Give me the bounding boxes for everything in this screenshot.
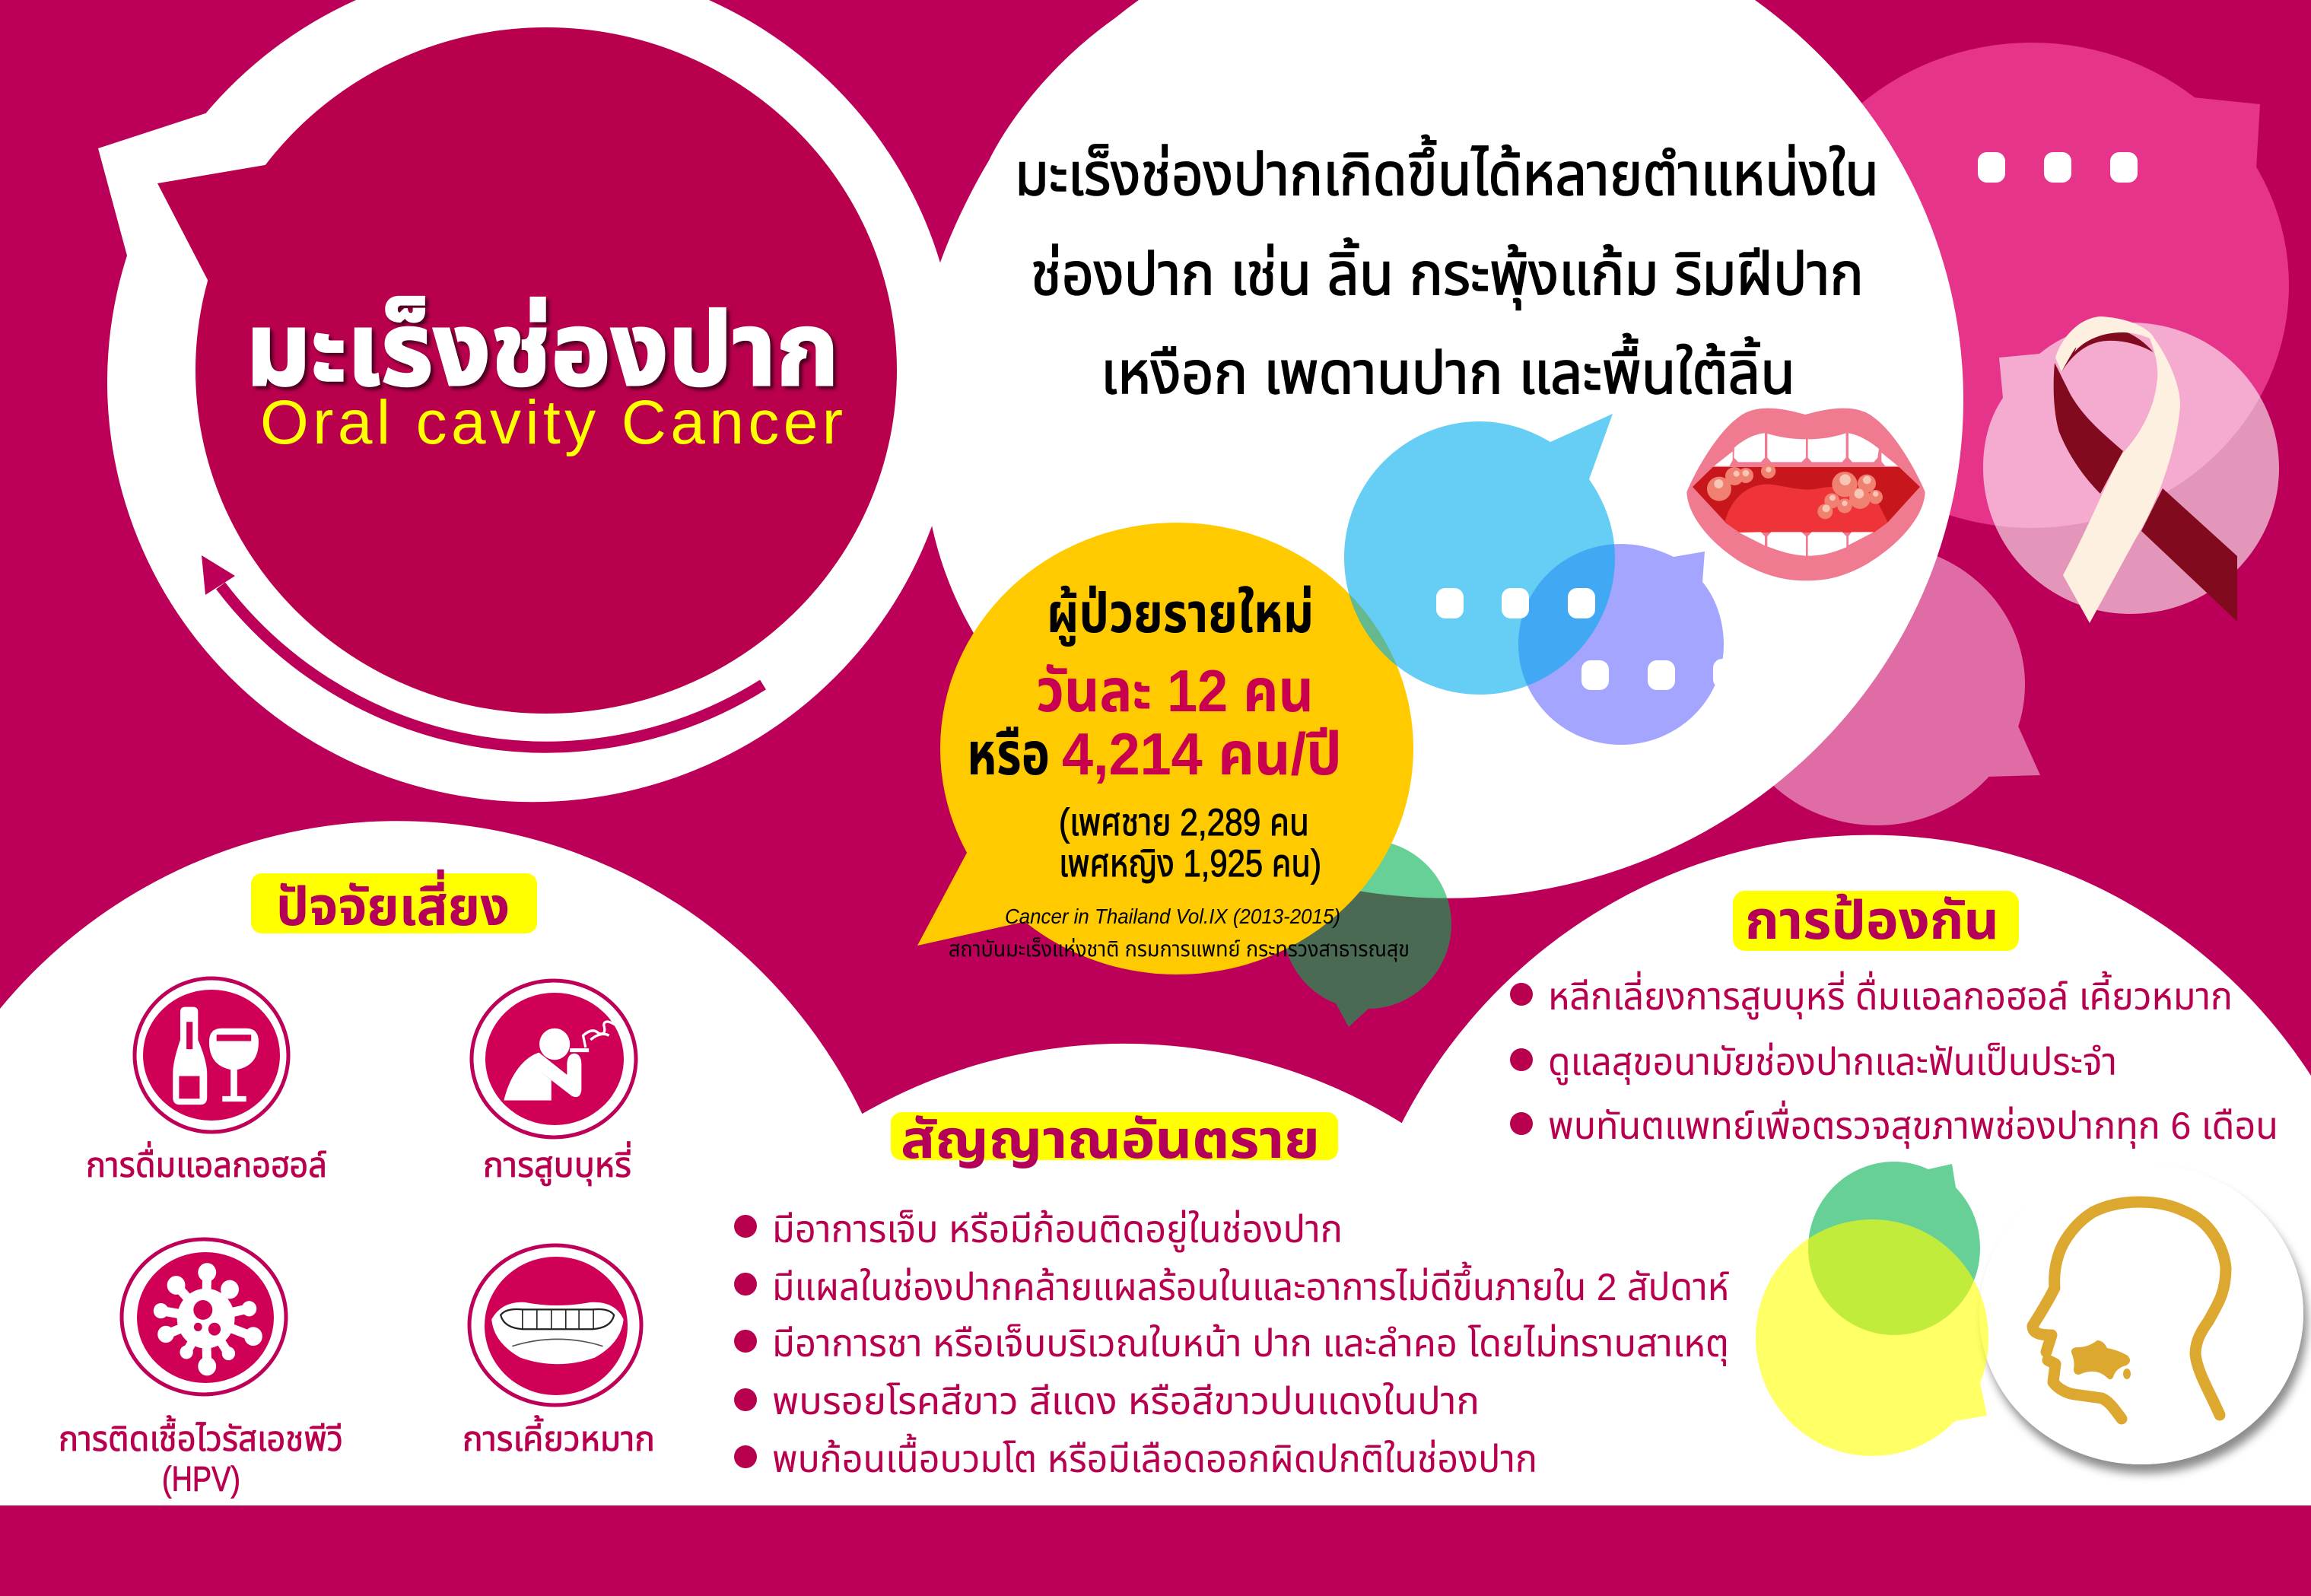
- label: HPV: การติดเชื้อไวรัสเอชพีวี: [59, 1415, 343, 1458]
- stats text: [949, 583, 1410, 962]
- list: warning signs: มีอาการชา หรือเจ็บบริเวณใบหน้า ปาก และลำคอ โดยไม่ทราบสาเหตุ: [772, 1322, 1729, 1366]
- intro paragraph: ช่องปาก เช่น ลิ้น กระพุ้งแก้ม ริมฝีปาก: [1031, 238, 1864, 310]
- label: betel chewing: การเคี้ยวหมาก: [463, 1415, 655, 1458]
- list: prevention: [1510, 971, 2278, 1149]
- arrow around header bubble: [202, 555, 763, 747]
- decorative bubble: lower pink: [1728, 544, 2040, 825]
- bottom panel: warning signs background: [603, 1044, 1645, 1505]
- list: warning signs: มีแผลในช่องปากคล้ายแผลร้อนในและอาการไม่ดีขึ้นภายใน 2 สัปดาห์: [772, 1261, 1729, 1308]
- label: HPV: (HPV): [162, 1459, 240, 1499]
- heading: risk factors: ปัจจัยเสี่ยง: [276, 870, 510, 936]
- stats text: 4,214 คน/ปี: [1062, 720, 1342, 787]
- list: prevention: ดูแลสุขอนามัยช่องปากและฟันเป็นประจำ: [1548, 1041, 2117, 1085]
- main white speech bubble: [930, 0, 1963, 898]
- blue and purple bubble dots: [1436, 588, 1740, 690]
- icon: open mouth with sores: [1686, 409, 1925, 580]
- icon: smoking: [472, 981, 636, 1137]
- blue bubble: [1344, 414, 1615, 695]
- bottom panel: prevention background: [1343, 835, 2311, 1505]
- list: prevention: หลีกเลี่ยงการสูบบุหรี่ ดื่มแอลกอฮอล์ เคี้ยวหมาก: [1548, 971, 2233, 1019]
- stats text: สถาบันมะเร็งแห่งชาติ กรมการแพทย์ กระทรวงสาธารณสุข: [949, 937, 1410, 962]
- label: HPV: [59, 1415, 343, 1499]
- list: prevention: พบทันตแพทย์เพื่อตรวจสุขภาพช่องปากทุก 6 เดือน: [1548, 1100, 2278, 1149]
- decorative bubble: pale pink: [1983, 323, 2279, 614]
- bottom band: [0, 1505, 2311, 1596]
- decorative bubble: large pink: [1775, 43, 2289, 528]
- decorative bubble dots: [1978, 152, 2138, 183]
- label: smoking: การสูบบุหรี่: [483, 1141, 631, 1186]
- purple bubble: [1518, 544, 1724, 745]
- heading: prevention: การป้องกัน: [1745, 891, 1999, 950]
- stats text: วันละ 12 คน: [1036, 657, 1314, 724]
- decorative bubble: yellow lower right: [1756, 1219, 1988, 1456]
- list: warning signs: พบรอยโรคสีขาว สีแดง หรือสีขาวปนแดงในปาก: [772, 1380, 1480, 1423]
- bottom panel: risk factors background: [0, 821, 913, 1505]
- list: warning signs: พบก้อนเนื้อบวมโต หรือมีเลือดออกผิดปกติในช่องปาก: [772, 1433, 1537, 1480]
- heading: warning signs: สัญญาณอันตราย: [901, 1110, 1320, 1169]
- icon: virus: [122, 1239, 286, 1394]
- stats text: เพศหญิง 1,925 คน): [1059, 842, 1321, 885]
- title: มะเร็งช่องปาก: [246, 292, 839, 407]
- icon: awareness ribbon: [2054, 316, 2237, 623]
- list: warning signs: [734, 1208, 1729, 1480]
- icon: head profile with throat lesion: [1979, 1163, 2303, 1464]
- decorative bubble: green lower right: [1808, 1162, 1980, 1335]
- intro paragraph: เหงือก เพดานปาก และพื้นใต้ลิ้น: [1101, 333, 1795, 406]
- label: alcohol: การดื่มแอลกอฮอล์: [86, 1141, 327, 1184]
- icon: betel chewing teeth: [469, 1245, 641, 1405]
- intro paragraph: มะเร็งช่องปากเกิดขึ้นได้หลายตำแหน่งใน: [1015, 135, 1879, 208]
- title English: Oral cavity Cancer: [260, 388, 843, 457]
- header speech bubble: outer white ring: [98, 0, 958, 802]
- stats text: (เพศชาย 2,289 คน: [1059, 801, 1309, 844]
- stats text: ผู้ป่วยรายใหม่: [1047, 583, 1314, 647]
- stats text: Cancer in Thailand Vol.IX (2013-2015): [1005, 905, 1340, 928]
- list: warning signs: มีอาการเจ็บ หรือมีก้อนติดอยู่ในช่องปาก: [772, 1208, 1343, 1252]
- stats yellow speech bubble: [917, 523, 1413, 974]
- stats text: หรือ: [967, 720, 1050, 787]
- green bubble behind stats: [1283, 840, 1451, 1027]
- intro paragraph: [1015, 135, 1879, 406]
- header speech bubble: inner crimson: [157, 27, 897, 714]
- icon: alcohol: [135, 978, 288, 1132]
